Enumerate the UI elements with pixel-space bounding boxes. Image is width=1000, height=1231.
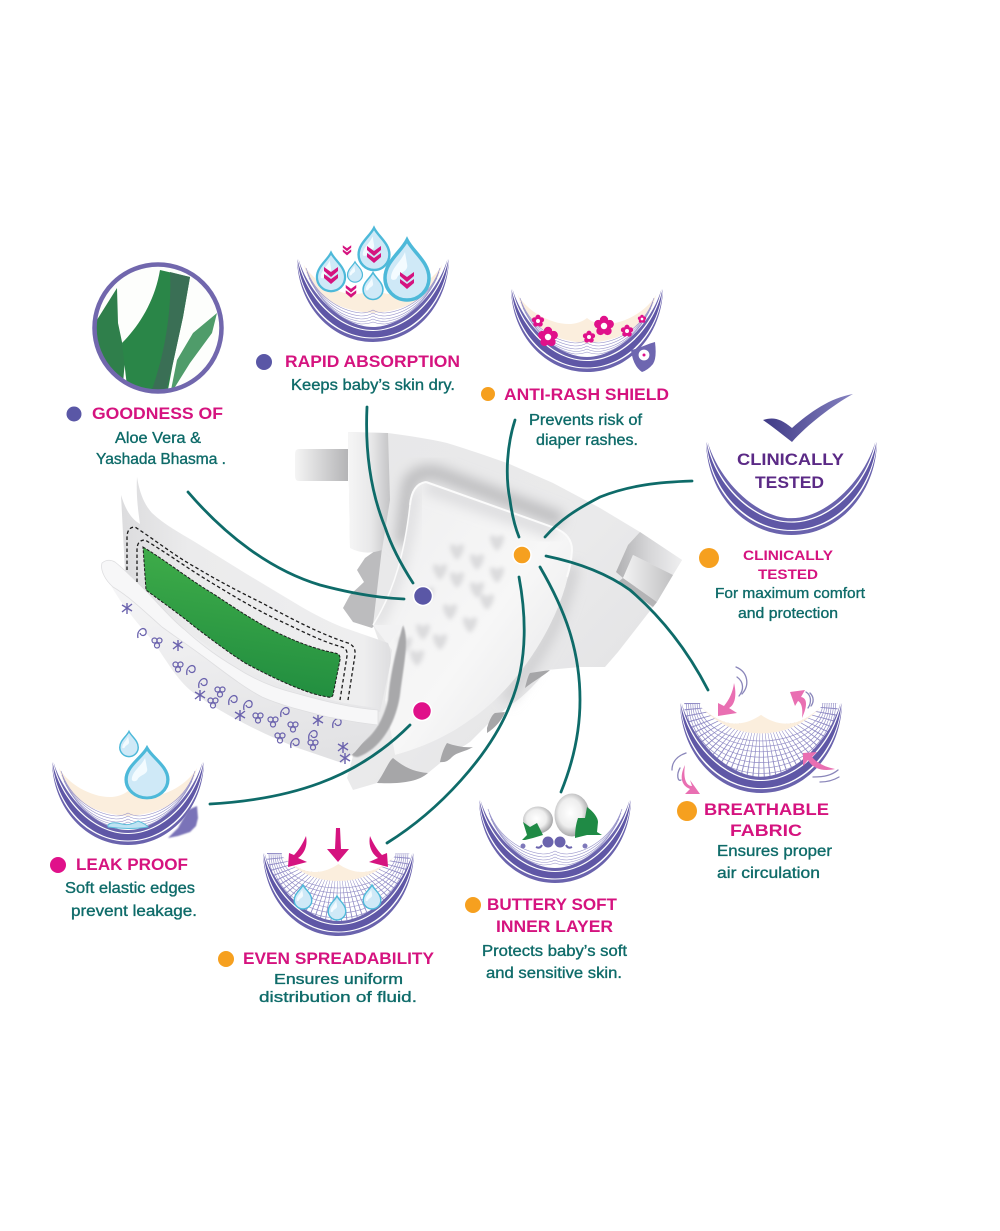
icon: check mark [763,394,853,442]
description [96,430,226,468]
connector: leak proof [210,725,410,804]
panel: breathable fabric [672,667,842,882]
icon: bowl with drops [297,228,449,342]
description: Protects baby’s soft [482,943,628,960]
description [65,880,197,920]
connector: buttery soft layer [540,567,580,792]
heading: BUTTERY SOFT [487,895,618,914]
diaper main body [347,432,682,790]
connector: goodness of aloe [188,492,404,599]
description: Aloe Vera & [115,430,202,447]
icon: bowl with drops and elastic edge [52,731,204,845]
heading: CLINICALLY [743,547,834,563]
white lip of flap [102,560,378,725]
description: air circulation [717,865,820,882]
heading [704,800,829,840]
description: prevent leakage. [71,903,197,920]
panel: anti-rash shield [481,289,669,449]
left body strip [348,432,390,553]
heading: RAPID ABSORPTION [285,352,460,371]
icon: bowl with cotton [479,794,631,883]
legend dot [677,801,697,821]
description: Ensures uniform [274,971,403,988]
icon: bowl with flowers and shield [511,289,663,372]
description: and sensitive skin. [486,965,622,982]
pad dimples [398,535,504,666]
heading: LEAK PROOF [76,855,188,874]
badge crescent [706,442,877,535]
pad outline [426,482,572,577]
heading: GOODNESS OF [92,404,223,423]
badge text [737,450,845,492]
legend dot [481,387,495,401]
description: and protection [738,605,838,622]
heading: EVEN SPREADABILITY [243,949,435,968]
heading: TESTED [758,566,818,582]
connector: anti-rash shield [507,420,519,537]
description [715,585,866,622]
marker: purple dot [414,586,432,606]
description [482,943,628,982]
panel: rapid absorption [256,228,460,394]
panel: clinically tested [699,394,877,622]
heading: ANTI-RASH SHIELD [504,385,669,404]
marker: orange dot [513,546,531,564]
panel: buttery soft inner layer [465,794,631,982]
description: Keeps baby’s skin dry. [291,377,455,394]
description [529,412,643,449]
description: Soft elastic edges [65,880,195,897]
panel: leak proof [50,731,204,920]
heading: FABRIC [730,821,802,840]
right wing tab [623,555,673,602]
icon: aloe vera circle [90,260,226,396]
description: diaper rashes. [536,432,638,449]
legend dot [256,354,272,370]
absorbent pad [373,482,572,755]
shading around pad [402,472,562,545]
marker: magenta dot [412,702,432,720]
description [717,843,832,882]
legend dot [465,897,481,913]
icon: net bowl with air arrows [672,667,842,794]
lower frills [377,670,550,783]
heading [743,547,834,582]
legend dot [50,857,66,873]
left fastening tab [295,449,348,481]
description: Ensures proper [717,843,832,860]
icon: net bowl with drops and arrows [263,828,414,936]
description: Yashada Bhasma . [96,451,226,468]
printed outer band with motifs [102,563,378,764]
panel: even spreadability [218,828,435,1006]
infographic canvas [50,225,877,1002]
description [259,971,417,1006]
dashed stitching [127,527,355,700]
panel: goodness of aloe [66,260,226,468]
description: Prevents risk of [529,412,643,429]
badge text: TESTED [755,473,824,492]
legend dot [66,406,82,422]
flap fold shadow [351,625,406,757]
legend dot [218,951,234,967]
connector: even spreadability [387,577,524,843]
gray frill behind body [343,546,400,628]
badge text: CLINICALLY [737,450,845,469]
description: For maximum comfort [715,585,866,602]
connector: breathable fabric [546,556,708,690]
heading: INNER LAYER [496,917,613,936]
heading [487,895,618,936]
inner flap with dashes [121,477,391,712]
right wing shade [616,532,682,578]
diaper illustration [102,432,682,790]
connector: clinically tested [545,481,692,537]
description: distribution of fluid. [259,989,417,1006]
connector: rapid absorption [367,407,413,583]
heading: BREATHABLE [704,800,829,819]
legend dot [699,548,719,568]
green aloe strip [143,547,340,697]
